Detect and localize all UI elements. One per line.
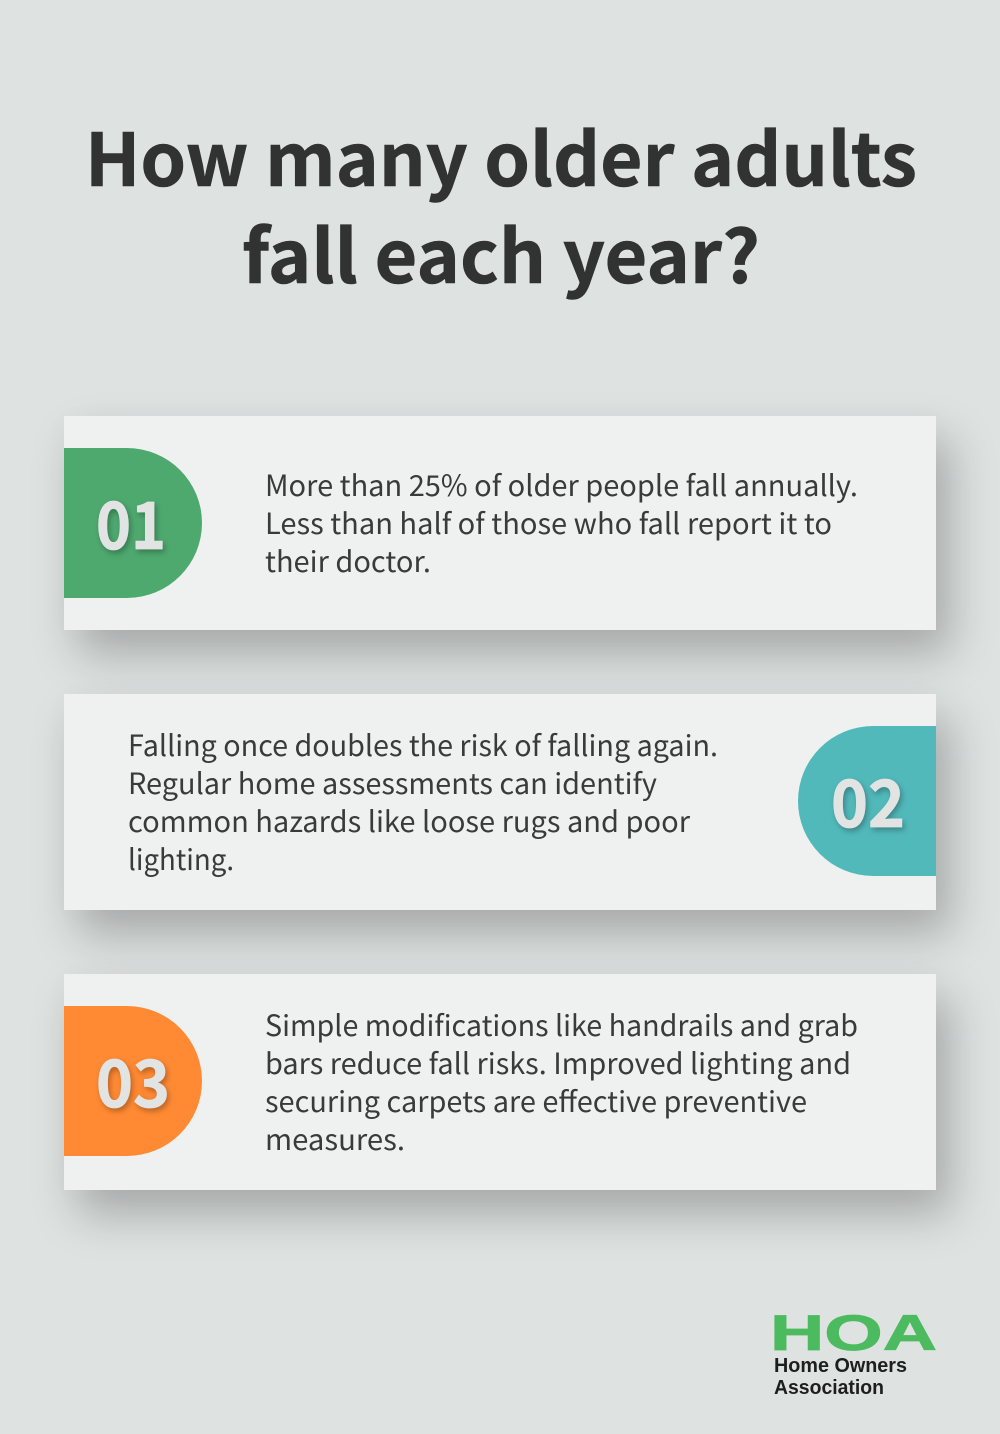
- text: card 03: Simple modifications like handrails and grab: [265, 1003, 858, 1045]
- text: card 03: bars reduce fall risks. Improved lighting and: [265, 1041, 851, 1083]
- logo: HOA Home Owners Association: Association: [774, 1377, 884, 1399]
- badge 01: [64, 448, 202, 598]
- text: card 02: Falling once doubles the risk of falling again.: [128, 723, 718, 765]
- badge 03: [64, 1006, 202, 1156]
- text: card 01: More than 25% of older people fall annually.: [265, 463, 858, 505]
- title: [85, 102, 917, 305]
- panel: card 03: [64, 974, 936, 1190]
- title: fall each year?: [242, 199, 760, 305]
- panel: card 02: [64, 694, 936, 910]
- number 03: 03: [96, 1032, 170, 1126]
- text: card 02: Regular home assessments can identify: [128, 761, 657, 803]
- number 02: 02: [831, 752, 905, 846]
- panel: card 01: [64, 416, 936, 630]
- text: card 03: measures.: [265, 1117, 405, 1159]
- logo: HOA Home Owners Association: Home Owners: [774, 1355, 907, 1377]
- text: card 01: Less than half of those who fall report it to: [265, 501, 832, 543]
- text: card 03: securing carpets are effective preventive: [265, 1079, 807, 1121]
- number 01: 01: [96, 474, 166, 568]
- title: How many older adults: [85, 102, 917, 208]
- text: card 01: their doctor.: [265, 539, 431, 581]
- logo: HOA Home Owners Association: HOA: [770, 1305, 937, 1361]
- badge 02: [798, 726, 936, 876]
- text: card 02: lighting.: [128, 837, 234, 879]
- text: card 02: common hazards like loose rugs and poor: [128, 799, 691, 841]
